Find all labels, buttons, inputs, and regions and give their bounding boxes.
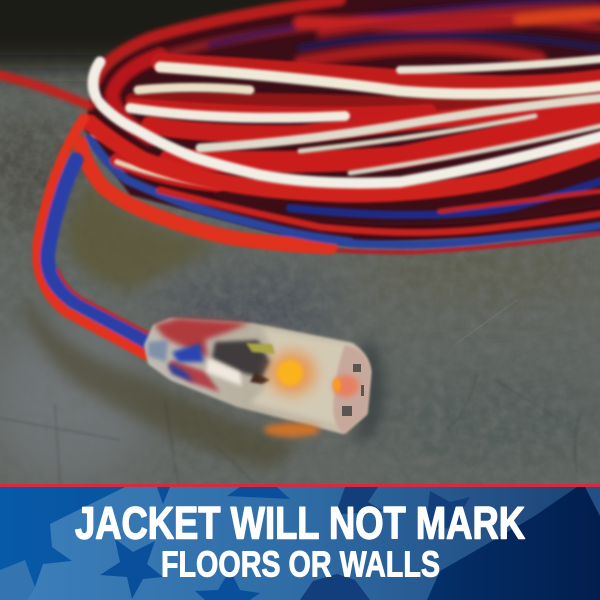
lighted plug xyxy=(144,318,371,437)
red jacket seen through plug xyxy=(154,318,250,358)
plug slots xyxy=(342,364,364,416)
red inner base wires xyxy=(132,92,600,162)
blue conductor seen through plug xyxy=(172,343,204,362)
red tail wire xyxy=(0,74,90,106)
banner subheading: FLOORS OR WALLS xyxy=(161,544,440,585)
orange floor glow xyxy=(264,423,320,437)
plug body xyxy=(144,318,371,434)
dark lower coil gap xyxy=(200,155,600,225)
distressed star pattern xyxy=(0,487,600,600)
cable coil xyxy=(0,0,600,252)
main red wire xyxy=(90,123,600,194)
outer top red wire and inner rim xyxy=(96,0,340,138)
main white wire xyxy=(93,62,600,183)
blurred back wires xyxy=(150,0,600,62)
plug face xyxy=(333,345,371,434)
power cord to plug xyxy=(37,118,148,356)
red divider line xyxy=(0,484,600,487)
lower coil wires xyxy=(80,134,600,252)
bottom banner xyxy=(0,487,600,600)
dark inner contacts xyxy=(212,340,270,378)
red under top white wire xyxy=(160,62,600,84)
LED glow xyxy=(268,351,316,395)
white wires xyxy=(130,58,600,173)
coil interior shadow xyxy=(85,0,600,245)
